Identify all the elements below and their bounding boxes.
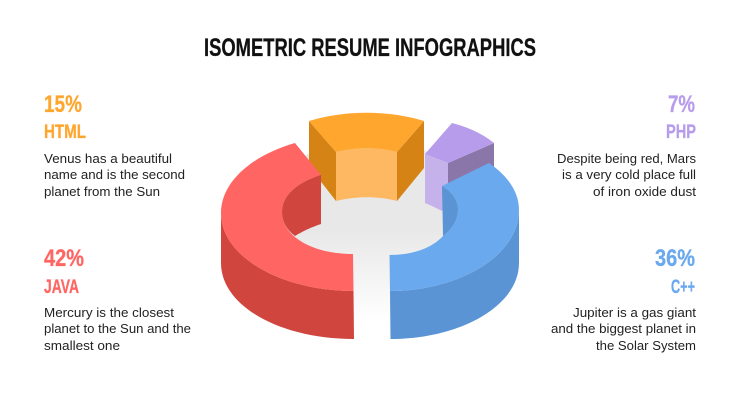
segment: orange HTML [309, 113, 424, 201]
segment: red JAVA [221, 143, 354, 339]
C++ description: the Solar System [596, 338, 696, 353]
panel: PHP [557, 91, 696, 199]
panel: HTML [44, 91, 185, 199]
C++ description: Jupiter is a gas giant [573, 305, 696, 320]
PHP label: PHP [666, 122, 696, 143]
HTML description: Venus has a beautiful [44, 151, 172, 166]
panel: C++ [551, 245, 696, 353]
JAVA description: Mercury is the closest [44, 305, 174, 320]
C++ description: and the biggest planet in [551, 321, 696, 336]
HTML description [44, 151, 185, 199]
segment: purple PHP [425, 123, 494, 211]
JAVA description [44, 305, 191, 353]
JAVA description: smallest one [44, 338, 120, 353]
title: ISOMETRIC RESUME INFOGRAPHICS [204, 34, 536, 62]
PHP description: of iron oxide dust [593, 184, 696, 199]
PHP description: is a very cold place full [562, 167, 696, 182]
JAVA description: planet to the Sun and the [44, 321, 191, 336]
JAVA label: JAVA [44, 277, 79, 298]
HTML percentage: 15% [44, 91, 82, 118]
C++ percentage: 36% [655, 245, 695, 272]
HTML description: name and is the second [44, 167, 185, 182]
PHP description [557, 151, 696, 199]
HTML label: HTML [44, 122, 86, 143]
C++ description [551, 305, 696, 353]
HTML description: planet from the Sun [44, 184, 160, 199]
chart: isometric donut [221, 113, 519, 339]
panel: JAVA [44, 245, 191, 353]
PHP description: Despite being red, Mars [557, 151, 696, 166]
JAVA percentage: 42% [44, 245, 84, 272]
C++ label: C++ [671, 277, 695, 298]
donut floor [260, 138, 480, 322]
segment: blue C++ [390, 163, 519, 339]
PHP percentage: 7% [668, 91, 695, 118]
